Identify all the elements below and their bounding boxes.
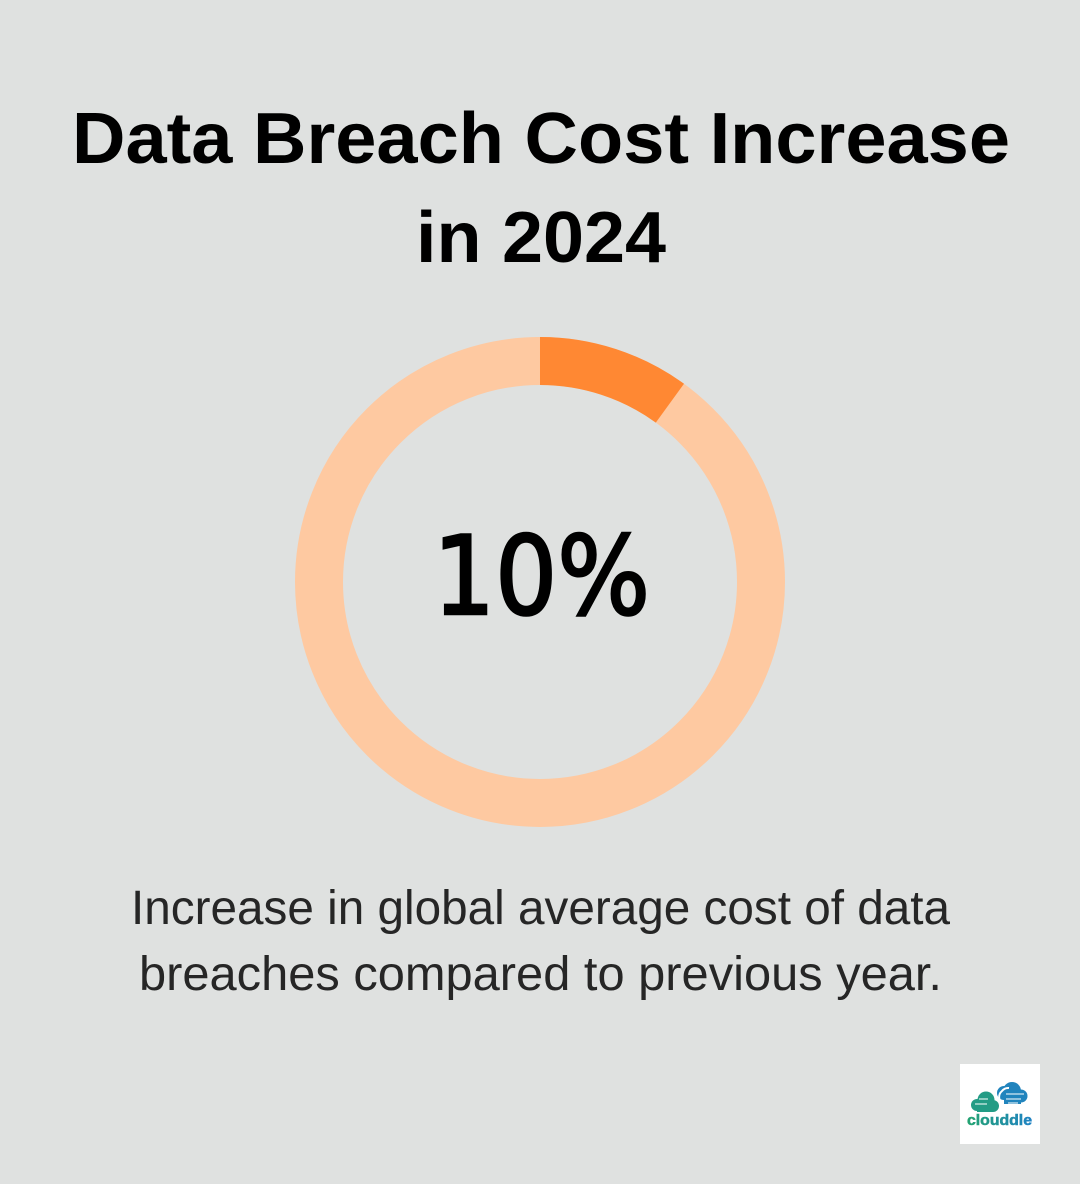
description: Increase in global average cost of data (131, 882, 950, 935)
donut chart (319, 361, 761, 803)
logo wordmark: clouddle (967, 1113, 1032, 1129)
icon: clouds (971, 1082, 1028, 1112)
title: Data Breach Cost Increase (72, 99, 1010, 179)
title (72, 99, 1010, 278)
donut value: 10% (433, 513, 650, 640)
description: breaches compared to previous year. (139, 948, 942, 1001)
description (131, 882, 950, 1001)
title: in 2024 (416, 198, 666, 278)
logo: clouddle (960, 1064, 1040, 1144)
